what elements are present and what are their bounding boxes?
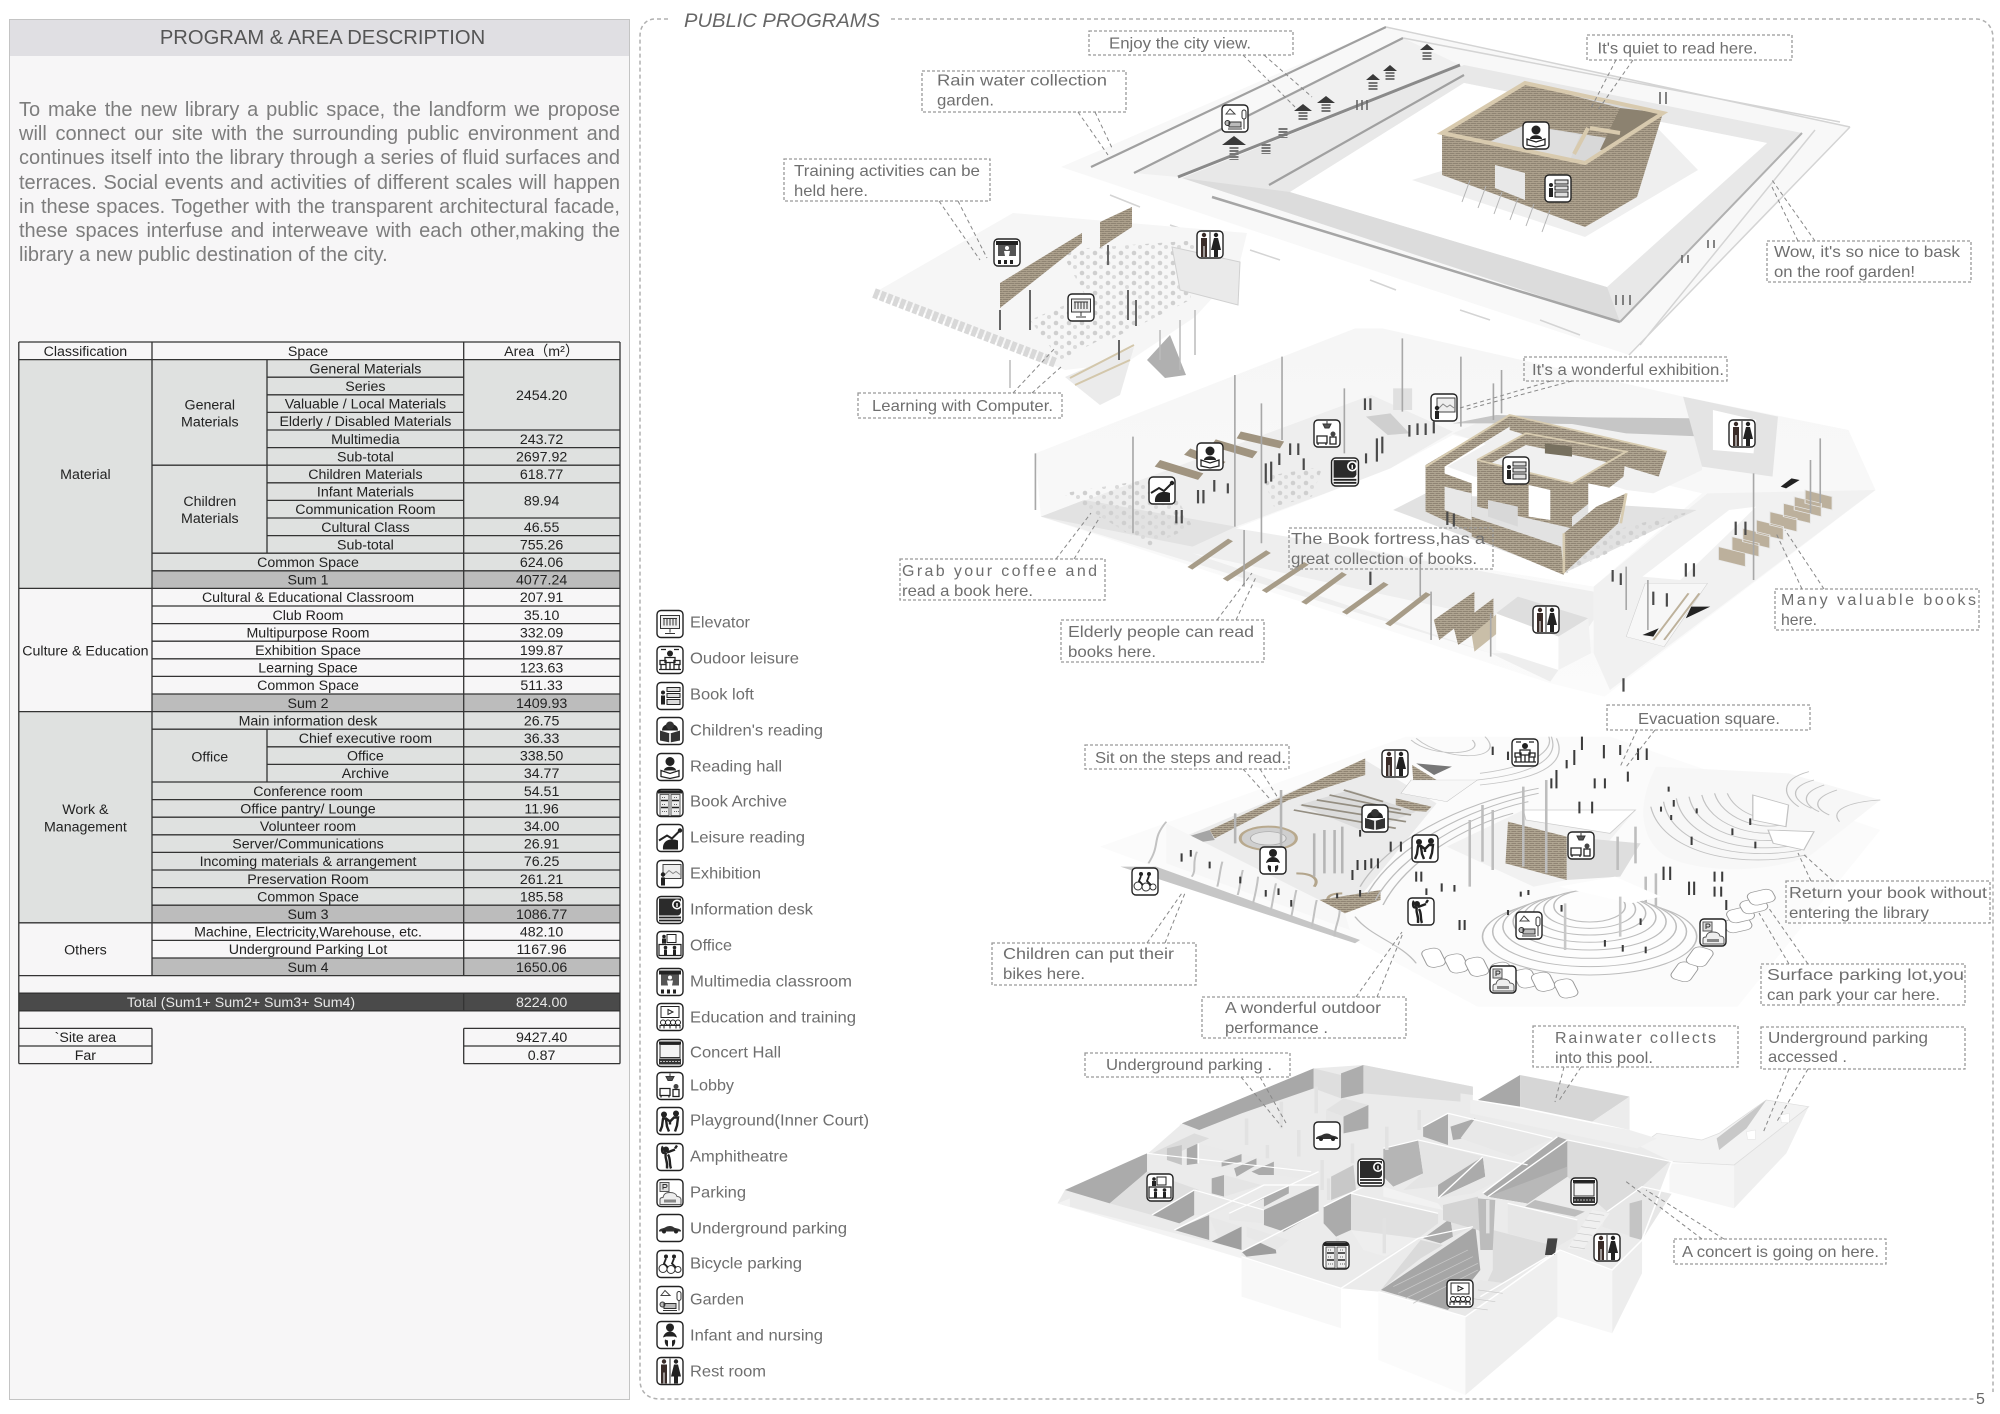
table total row: 8224.00 <box>516 995 567 1011</box>
text block: introduction: terraces. Social events and activities of different scales will happen <box>19 172 620 194</box>
icon: rest room <box>1197 231 1223 258</box>
table group: material: Multimedia <box>331 432 400 448</box>
ground floor visitors <box>1182 737 1755 953</box>
legend item: office: Office <box>690 938 732 954</box>
legend item: rest room: Rest room <box>690 1364 766 1380</box>
callout: underground parking access: Underground parking <box>1768 1030 1928 1047</box>
icon: leisure reading <box>1149 477 1175 504</box>
table group: material: 4077.24 <box>516 573 567 589</box>
table group: culture and education: Multipurpose Room <box>246 625 370 641</box>
heading: public programs: PUBLIC PROGRAMS <box>684 10 880 32</box>
text block: introduction <box>19 99 620 266</box>
legend item: exhibition: Exhibition <box>690 866 761 882</box>
table group: material: Sub-total <box>337 449 394 465</box>
table group: material: Elderly / Disabled Materials <box>279 414 451 430</box>
callout: wonderful exhibition: It's a wonderful exhibition. <box>1532 362 1724 379</box>
table group: culture and education: Learning Space <box>258 661 358 677</box>
second floor shelves <box>1157 435 1832 670</box>
table group: work and management: Main information desk <box>239 713 378 729</box>
table site area and far: 0.87 <box>528 1048 556 1064</box>
icon: rest room <box>1594 1234 1620 1261</box>
table group: culture and education: Club Room <box>273 608 343 624</box>
table group: culture and education: 511.33 <box>520 678 563 694</box>
icon: garden <box>1516 912 1542 939</box>
table group: work and management: Office pantry/ Lounge <box>240 801 376 817</box>
icon: lobby <box>1568 832 1594 859</box>
icon: rest room <box>1729 420 1755 447</box>
icon: multimedia classroom <box>994 239 1020 266</box>
legend item: information desk <box>657 896 814 924</box>
table group: culture and education: 1409.93 <box>516 696 567 712</box>
callout: surface parking: Surface parking lot,you <box>1767 967 1964 984</box>
table group: others: Others <box>64 943 107 959</box>
legend item: playground: Playground(Inner Court) <box>690 1112 869 1130</box>
callout: children's bikes <box>992 893 1196 985</box>
icon: outdoor leisure <box>1512 739 1538 766</box>
legend item: outdoor leisure: Oudoor leisure <box>690 650 799 668</box>
ground floor north mound <box>1411 737 1559 785</box>
legend item: concert hall <box>657 1040 781 1066</box>
callout: learning with computer: Learning with Computer. <box>872 398 1053 415</box>
icon: reading hall <box>1523 122 1549 149</box>
table group: work and management: 11.96 <box>524 801 559 817</box>
callout: outdoor performance <box>1202 932 1406 1038</box>
table group: material: 46.55 <box>524 520 559 536</box>
callout: training activities: held here. <box>794 183 868 200</box>
icon: rest room <box>1533 606 1559 633</box>
icon: reading hall <box>1197 443 1223 470</box>
table group: material: 2454.20 <box>516 388 567 404</box>
drawing: second floor library <box>1035 328 1876 697</box>
legend item: outdoor leisure <box>657 646 799 674</box>
callout: underground parking access <box>1761 1027 1965 1133</box>
icon: book loft <box>1545 175 1571 202</box>
legend item: parking <box>657 1180 746 1206</box>
table site area and far: Far <box>75 1048 96 1064</box>
legend item: bicycle parking: Bicycle parking <box>690 1256 802 1272</box>
table group: material: General <box>185 397 235 413</box>
legend item: amphitheatre <box>657 1144 788 1170</box>
icon: children's reading <box>1362 805 1388 832</box>
ground floor parked cars <box>1420 888 1777 999</box>
text block: introduction: library a new public destination of the city. <box>19 244 388 266</box>
text block: introduction: in these spaces. Together with the transparent architectural facade, <box>19 196 620 218</box>
callout: underground parking access: accessed . <box>1768 1049 1847 1066</box>
callout: training activities <box>784 159 990 260</box>
legend item: garden <box>657 1286 744 1314</box>
callout: outdoor performance: A wonderful outdoor <box>1225 1000 1382 1017</box>
table header row <box>44 344 579 360</box>
callout: sit on the steps <box>1085 745 1289 798</box>
callout: return your book <box>1786 853 1990 923</box>
callout: return your book: entering the library <box>1789 905 1929 922</box>
table group: work and management: Common Space <box>257 889 359 905</box>
callout: elderly people: books here. <box>1068 644 1156 661</box>
table group: work and management: 26.75 <box>524 713 559 729</box>
legend item: information desk: Information desk <box>690 902 814 918</box>
table group: material: 243.72 <box>520 432 563 448</box>
callout: training activities: Training activities can be <box>794 163 980 180</box>
second floor people <box>1176 398 1745 692</box>
icon: concert hall <box>1571 1178 1597 1205</box>
icon: book loft <box>1503 457 1529 484</box>
table group: material: Sum 1 <box>287 573 329 589</box>
table total row: Total (Sum1+ Sum2+ Sum3+ Sum4) <box>127 995 355 1011</box>
callout: underground parking <box>1085 1053 1290 1127</box>
table grid lines <box>19 342 620 1064</box>
legend item: parking: Parking <box>690 1184 746 1202</box>
ground floor east mound <box>1643 767 1880 869</box>
ground floor bike band and fins <box>1120 822 1360 943</box>
callout: enjoy the city view: Enjoy the city view. <box>1109 36 1251 52</box>
table group: material: Valuable / Local Materials <box>285 397 446 413</box>
table cell fills <box>19 360 620 1011</box>
callout: elderly people <box>1061 573 1264 662</box>
roof garden umbrellas and seats <box>1222 44 1714 305</box>
table group: work and management: 34.77 <box>524 766 559 782</box>
legend item: garden: Garden <box>690 1292 744 1308</box>
legend item: infant and nursing <box>657 1322 823 1348</box>
legend item: book loft: Book loft <box>690 686 755 704</box>
page number: 5 <box>1976 1391 1985 1408</box>
drawing: upper floor learning area <box>874 207 1247 405</box>
callout: evacuation square: Evacuation square. <box>1638 711 1780 728</box>
table group: material: Children <box>183 494 236 510</box>
legend item: book archive <box>657 790 787 816</box>
table group: work and management: Volunteer room <box>260 819 356 835</box>
table total row <box>127 995 567 1011</box>
callout: surface parking <box>1759 907 1965 1005</box>
callout: concert <box>1624 1180 1886 1264</box>
table group: material: Material <box>60 467 111 483</box>
legend item: education and training: Education and training <box>690 1010 856 1026</box>
table group: others: Underground Parking Lot <box>229 942 387 958</box>
basement stair treads <box>1393 1213 1604 1310</box>
table group: work and management: 26.91 <box>524 837 559 853</box>
table group: material: Materials <box>181 414 239 430</box>
callout: book fortress: great collection of books. <box>1291 551 1477 568</box>
table group: culture and education: 207.91 <box>520 590 563 606</box>
callout: enjoy the city view <box>1089 31 1312 107</box>
callout: rainwater pool: Rainwater collects <box>1555 1030 1716 1047</box>
table group: culture and education <box>22 590 567 712</box>
basement wall tops <box>1147 1113 1672 1317</box>
table group: others: 1167.96 <box>516 942 567 958</box>
heading: program and area description: PROGRAM & AREA DESCRIPTION <box>160 27 485 49</box>
callout: quiet to read: It's quiet to read here. <box>1598 40 1758 58</box>
table group: work and management: Server/Communications <box>232 837 384 853</box>
table group: others: Machine, Electricity,Warehouse, etc. <box>194 925 422 941</box>
callout: children's bikes: Children can put their <box>1003 946 1175 963</box>
callout: quiet to read <box>1587 35 1792 110</box>
callout: grab your coffee: Grab your coffee and <box>902 563 1097 580</box>
icon: underground parking <box>1314 1122 1340 1149</box>
callout: learning with computer <box>858 347 1062 418</box>
table group: work and management: Incoming materials & arrangement <box>200 854 416 870</box>
table group: material: 755.26 <box>520 537 563 553</box>
table group: material: 624.06 <box>520 555 563 571</box>
callout: rainwater pool: into this pool. <box>1555 1050 1653 1067</box>
second floor book fortress <box>1426 415 1667 575</box>
callout: sit on the steps: Sit on the steps and read. <box>1095 750 1286 767</box>
ground floor east building <box>1447 780 1656 920</box>
table group: culture and education: Sum 2 <box>287 696 329 712</box>
table group: culture and education: Exhibition Space <box>255 643 361 659</box>
table group: material: Sub-total <box>337 537 394 553</box>
table group: material: 89.94 <box>524 494 559 510</box>
table group: material: Children Materials <box>308 467 423 483</box>
icon: book archive <box>1323 1242 1349 1269</box>
legend item: leisure reading <box>657 824 805 852</box>
callout: roof garden: Wow, it's so nice to bask <box>1774 244 1961 261</box>
table group: work and management: 261.21 <box>520 872 563 888</box>
legend item: book loft <box>657 682 755 710</box>
drawing: basement parking and concert hall <box>1057 1065 1809 1395</box>
table group: work and management: 76.25 <box>524 854 559 870</box>
icon: lobby <box>1314 420 1340 447</box>
callout: children's bikes: bikes here. <box>1003 966 1085 983</box>
legend item: concert hall: Concert Hall <box>690 1044 781 1062</box>
table group: material: Infant Materials <box>317 485 414 501</box>
callout: valuable books: Many valuable books <box>1781 592 1976 609</box>
icon: computer <box>1068 294 1094 321</box>
table group: work and management: Office <box>191 749 228 765</box>
icon: information desk <box>1332 458 1358 486</box>
legend item: underground parking <box>657 1214 847 1242</box>
icon: garden <box>1222 105 1248 132</box>
icon: bicycle parking <box>1132 868 1158 895</box>
legend item: underground parking: Underground parking <box>690 1220 847 1238</box>
table group: material: Common Space <box>257 555 359 571</box>
legend item: exhibition <box>657 860 761 888</box>
icon: rest room <box>1382 750 1408 777</box>
legend item: lobby: Lobby <box>690 1078 734 1094</box>
callout: valuable books: here. <box>1781 612 1817 629</box>
icon: office <box>1147 1174 1173 1201</box>
legend item: multimedia classroom: Multimedia classroom <box>690 974 852 990</box>
callout: valuable books <box>1775 530 1979 630</box>
table group: culture and education: 332.09 <box>520 625 563 641</box>
icon: parking <box>1490 966 1516 993</box>
legend item: education and training <box>657 1004 856 1030</box>
table group: work and management: 338.50 <box>520 749 563 765</box>
icon: parking <box>1700 919 1726 946</box>
icon: exhibition <box>1431 394 1457 421</box>
table group: culture and education: 123.63 <box>520 661 563 677</box>
table group: culture and education: 199.87 <box>520 643 563 659</box>
table group: culture and education: Cultural & Educational Classroom <box>202 590 414 606</box>
table group: material <box>60 361 567 589</box>
table group: culture and education: 35.10 <box>524 608 559 624</box>
table header row: Classification <box>44 344 127 360</box>
callout: book fortress <box>1289 528 1493 569</box>
table group: others: Sum 4 <box>287 960 329 976</box>
callout: rain water collection garden: garden. <box>937 92 994 110</box>
ground floor north building <box>1176 758 1477 913</box>
table group: others: 1650.06 <box>516 960 567 976</box>
table group: work and management: Office <box>347 749 384 765</box>
legend item: playground <box>657 1108 869 1134</box>
callout: book fortress: The Book fortress,has a <box>1291 531 1485 548</box>
table group: work and management: Preservation Room <box>247 872 369 888</box>
table group: others: 482.10 <box>520 925 563 941</box>
legend item: lobby <box>657 1072 734 1100</box>
table group: culture and education: Culture & Education <box>22 644 148 660</box>
ground floor curved walkway <box>1355 788 1539 963</box>
heading: program and area description <box>10 20 635 56</box>
table group: material: Communication Room <box>295 502 436 518</box>
text block: introduction: will connect our site with the surrounding public environment and <box>19 123 620 145</box>
callout: elderly people: Elderly people can read <box>1068 624 1254 641</box>
table group: work and management: Work & <box>62 802 109 818</box>
table group: culture and education: Common Space <box>257 678 359 694</box>
table group: material: Series <box>345 379 386 395</box>
table group: others <box>64 925 567 976</box>
table group: work and management: Sum 3 <box>287 907 329 923</box>
callout: roof garden <box>1767 180 1971 282</box>
table group: work and management: Conference room <box>253 784 363 800</box>
callout: grab your coffee: read a book here. <box>902 583 1033 600</box>
text block: introduction: continues itself into the library through a series of fluid surfaces and <box>19 147 620 169</box>
table group: work and management: 54.51 <box>524 784 559 800</box>
panel: program and area description <box>9 19 630 1400</box>
legend item: leisure reading: Leisure reading <box>690 830 805 846</box>
callout: grab your coffee <box>900 513 1105 600</box>
table: classification, space and area <box>18 341 621 1064</box>
callout: evacuation square <box>1607 705 1810 767</box>
table site area and far: `Site area <box>55 1030 116 1046</box>
table group: work and management: Management <box>44 820 127 836</box>
legend item: bicycle parking <box>657 1250 802 1278</box>
table group: material: Cultural Class <box>321 520 410 536</box>
table group: work and management: 36.33 <box>524 731 559 747</box>
table group: material: Materials <box>181 511 239 527</box>
table site area and far <box>55 1030 567 1064</box>
table group: work and management: Chief executive room <box>299 731 432 747</box>
icon: playground <box>1412 835 1438 862</box>
callout: underground parking: Underground parking . <box>1106 1057 1272 1074</box>
icon: infant and nursing <box>1260 847 1286 874</box>
callout: concert: A concert is going on here. <box>1682 1244 1879 1261</box>
basement columns <box>1247 1087 1488 1258</box>
table header row: Area（m²） <box>504 344 579 360</box>
legend item: children's reading: Children's reading <box>690 722 823 740</box>
table group: work and management: 185.58 <box>520 889 563 905</box>
legend item: office <box>657 932 732 958</box>
ground floor south mound <box>1482 877 1697 975</box>
legend item: reading hall <box>657 754 782 780</box>
legend item: elevator <box>657 610 751 638</box>
legend item: amphitheatre: Amphitheatre <box>690 1148 788 1166</box>
icon: amphitheatre <box>1408 898 1434 925</box>
callout: rainwater pool <box>1533 1026 1738 1102</box>
callout: surface parking: can park your car here. <box>1767 987 1940 1004</box>
legend item: infant and nursing: Infant and nursing <box>690 1328 823 1344</box>
callout: roof garden: on the roof garden! <box>1774 264 1915 281</box>
callout: wonderful exhibition <box>1460 357 1727 410</box>
legend item: rest room <box>657 1358 766 1384</box>
basement room walls <box>1065 1113 1672 1317</box>
table group: material: General Materials <box>309 361 421 377</box>
legend item: multimedia classroom <box>657 968 852 996</box>
table group: work and management: 34.00 <box>524 819 559 835</box>
drawing: ground floor and landscape <box>1100 737 1880 1007</box>
dashed frame <box>640 19 1993 1399</box>
table group: work and management <box>44 713 567 923</box>
legend: program icons <box>657 610 869 1384</box>
text block: introduction: To make the new library a public space, the landform we propose <box>19 99 620 121</box>
text block: introduction: these spaces interfuse and interweave with each other,making the <box>19 220 620 242</box>
callout: rain water collection garden <box>922 71 1126 155</box>
icon: education and training <box>1447 1280 1473 1307</box>
table group: material: 2697.92 <box>516 449 567 465</box>
table group: work and management: 1086.77 <box>516 907 567 923</box>
icon: information desk <box>1358 1159 1384 1186</box>
callout: outdoor performance: performance . <box>1225 1020 1328 1037</box>
callout: rain water collection garden: Rain water collection <box>937 72 1107 90</box>
table group: work and management: Archive <box>342 766 389 782</box>
legend item: reading hall: Reading hall <box>690 758 782 776</box>
map icons placed on the drawings <box>994 105 1755 1307</box>
table group: material: 618.77 <box>520 467 563 483</box>
legend item: elevator: Elevator <box>690 614 751 632</box>
table header row: Space <box>288 344 328 360</box>
callout: return your book: Return your book without <box>1789 885 1988 902</box>
legend item: book archive: Book Archive <box>690 794 787 810</box>
table site area and far: 9427.40 <box>516 1030 567 1046</box>
legend item: children's reading <box>657 718 823 744</box>
drawing: roof garden axonometric <box>1061 27 1850 355</box>
